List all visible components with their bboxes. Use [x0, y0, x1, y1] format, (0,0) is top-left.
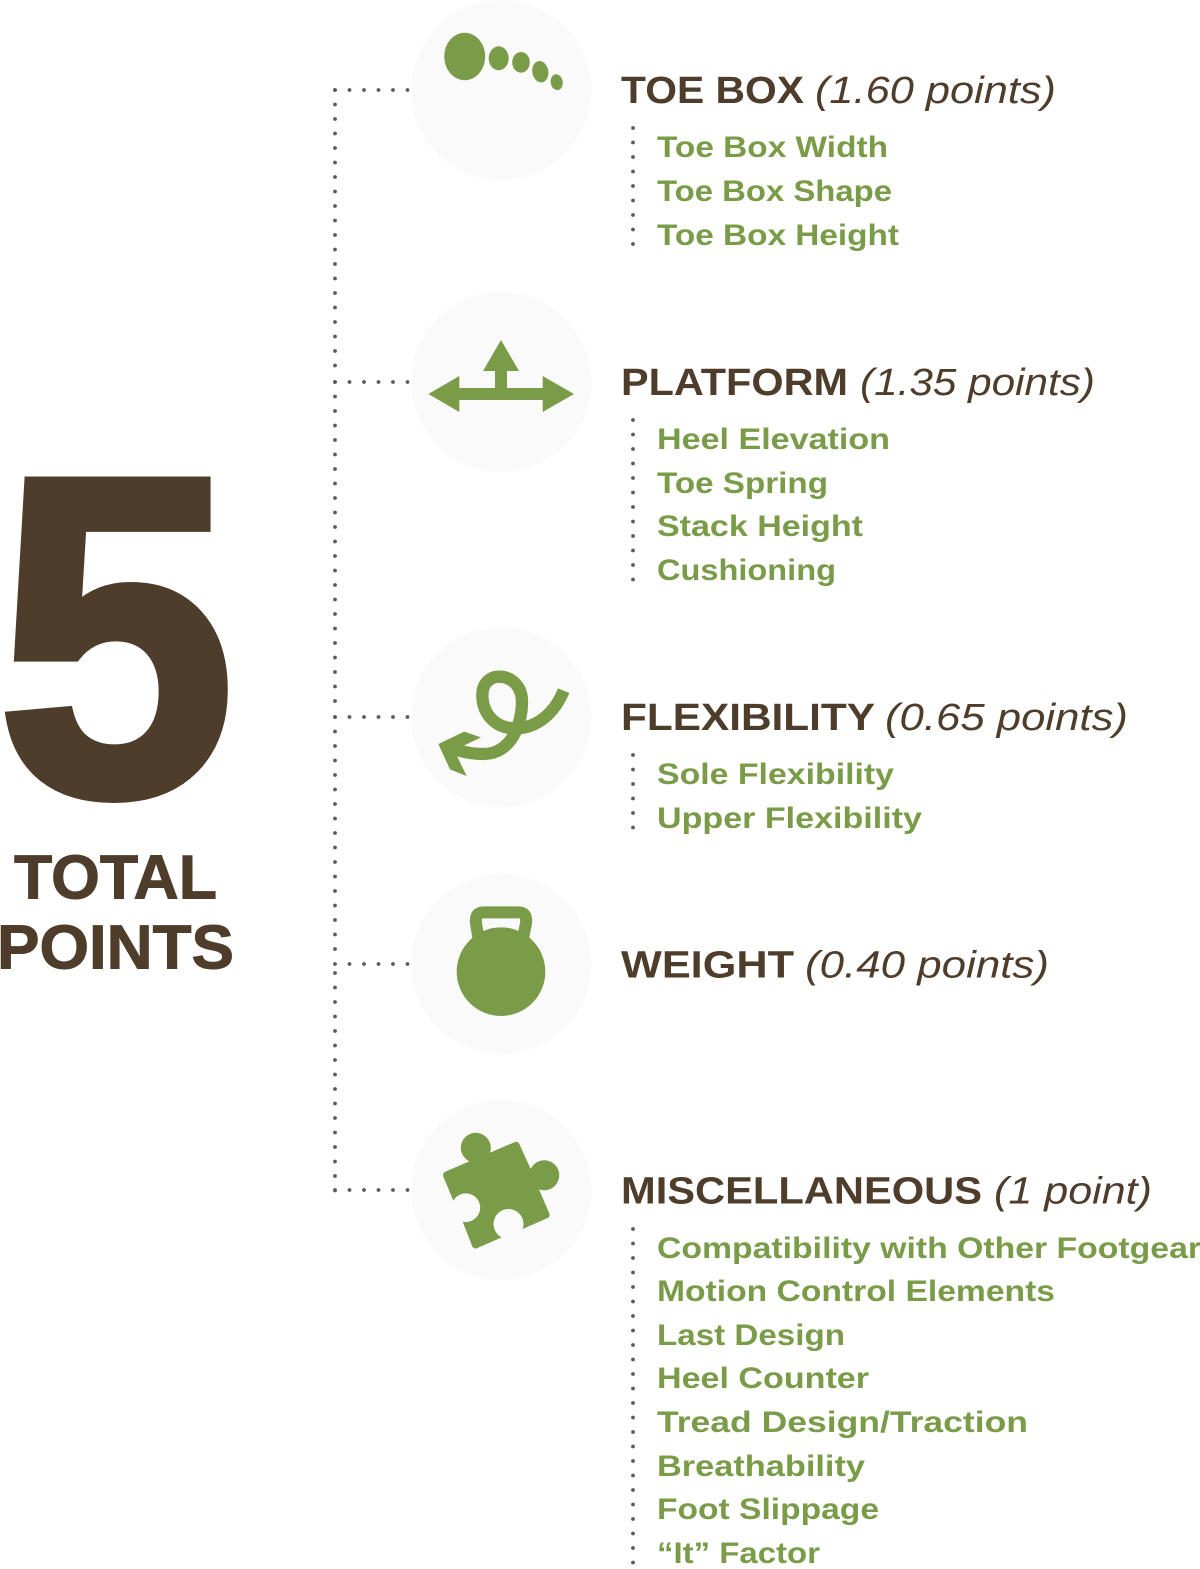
list: flexibility factors: Sole Flexibility	[657, 758, 894, 791]
list: miscellaneous factors: Compatibility with Other Footgear	[657, 1232, 1200, 1265]
big number 5: 5	[0, 383, 236, 891]
list: miscellaneous factors: Breathability	[657, 1450, 865, 1483]
icon: toes	[411, 0, 591, 180]
dotted connector tree	[335, 90, 408, 1191]
panel: flexibility	[411, 627, 1128, 835]
panel: platform	[411, 292, 1095, 587]
heading: flexibility	[621, 697, 1128, 739]
list: miscellaneous factors: Foot Slippage	[657, 1493, 879, 1526]
heading: weight: WEIGHT	[621, 944, 794, 986]
list: toe box factors: Toe Box Width	[657, 131, 888, 164]
list: platform factors: Toe Spring	[657, 467, 828, 500]
icon: kettlebell	[411, 874, 591, 1054]
icon: three-way arrow	[411, 292, 591, 472]
list: toe box factors: Toe Box Height	[657, 219, 899, 252]
list: miscellaneous factors: Last Design	[657, 1319, 845, 1352]
panel: miscellaneous	[411, 1100, 1200, 1569]
heading: toe box: (1.60 points)	[815, 70, 1056, 112]
heading: flexibility: FLEXIBILITY	[621, 697, 875, 739]
list: platform factors: Heel Elevation	[657, 423, 890, 456]
heading: weight: (0.40 points)	[805, 944, 1049, 986]
list: flexibility factors	[633, 755, 922, 835]
total points label: TOTAL	[14, 844, 217, 912]
heading: toe box: TOE BOX	[621, 70, 805, 112]
list: miscellaneous factors	[633, 1229, 1200, 1569]
list: miscellaneous factors: Heel Counter	[657, 1362, 869, 1395]
icon: puzzle piece	[411, 1100, 591, 1280]
total points label: POINTS	[0, 914, 234, 982]
heading: platform	[621, 362, 1095, 404]
list: flexibility factors: Upper Flexibility	[657, 802, 922, 835]
icon: curling arrow	[411, 627, 591, 807]
heading: platform: (1.35 points)	[860, 362, 1095, 404]
panel: weight	[411, 874, 1049, 1054]
list: miscellaneous factors: Motion Control Elements	[657, 1275, 1055, 1308]
heading: weight	[621, 944, 1049, 986]
heading: toe box	[621, 70, 1056, 112]
heading: miscellaneous	[621, 1170, 1152, 1212]
panel: toe box	[411, 0, 1056, 252]
list: platform factors	[633, 420, 890, 587]
list: platform factors: Stack Height	[657, 510, 863, 543]
heading: flexibility: (0.65 points)	[885, 697, 1128, 739]
list: toe box factors: Toe Box Shape	[657, 175, 892, 208]
total points label	[0, 844, 234, 982]
heading: platform: PLATFORM	[621, 362, 848, 404]
list: platform factors: Cushioning	[657, 554, 836, 587]
heading: miscellaneous: MISCELLANEOUS	[621, 1170, 982, 1212]
list: miscellaneous factors: Tread Design/Traction	[657, 1406, 1028, 1439]
list: toe box factors	[633, 128, 899, 252]
heading: miscellaneous: (1 point)	[994, 1170, 1152, 1212]
